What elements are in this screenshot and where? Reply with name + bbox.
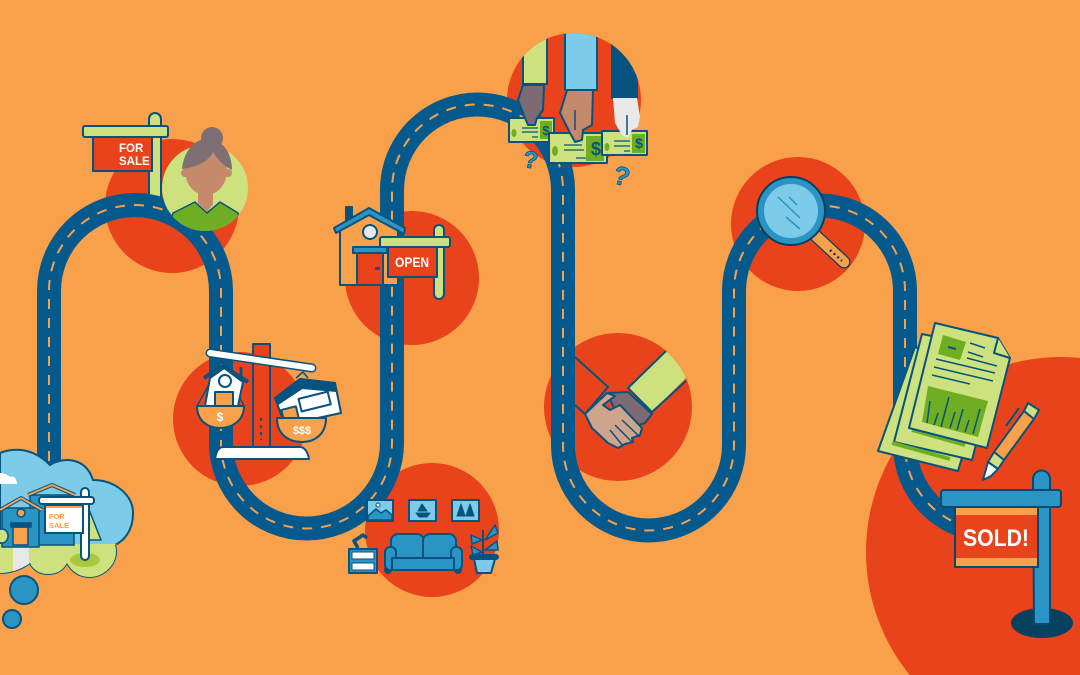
pencil (983, 403, 1039, 480)
beam (210, 353, 312, 368)
back house (30, 495, 74, 545)
sold text: SOLD! (963, 525, 1029, 552)
picture: mountains (367, 500, 393, 521)
sign post (1033, 470, 1050, 624)
red cuff (575, 357, 608, 414)
window (363, 225, 377, 239)
green cuff (628, 351, 686, 412)
magnifying glass (757, 177, 844, 262)
thought cloud: SALE (49, 521, 69, 530)
right sleeve (611, 44, 638, 99)
for sale sign (83, 113, 168, 203)
middle check (549, 133, 607, 163)
scale: $$$ (293, 425, 311, 437)
scale: $ (217, 410, 224, 424)
plant (470, 525, 498, 573)
three hands with checks (508, 33, 648, 186)
sofa (385, 534, 462, 573)
sold sign (941, 470, 1073, 638)
left check (509, 118, 554, 142)
small for sale text: FOR (49, 512, 65, 521)
sign board (955, 507, 1038, 567)
front house (2, 508, 39, 547)
left sleeve (522, 38, 548, 85)
thought bubble large (10, 576, 38, 604)
grass spot (70, 553, 100, 567)
house walls (340, 212, 398, 285)
ground (0, 544, 117, 577)
woman avatar (162, 127, 248, 240)
middle hand (560, 90, 593, 142)
for sale text: FOR (119, 143, 144, 155)
dark hand (607, 392, 652, 426)
picture: boat (409, 500, 436, 521)
road (49, 105, 990, 530)
for sale sign: SALE (119, 156, 150, 168)
tree (90, 510, 102, 541)
middle page (894, 334, 1000, 460)
neck (198, 193, 213, 212)
right check (602, 131, 647, 155)
thought cloud (0, 450, 135, 628)
three hands with checks: ? (610, 159, 633, 193)
documents (878, 323, 1010, 471)
open text: OPEN (395, 254, 429, 270)
right check: $ (635, 135, 643, 151)
right hand (613, 98, 640, 138)
front page (909, 323, 1010, 448)
door (357, 252, 383, 285)
hair (201, 127, 223, 149)
open sign (434, 225, 444, 299)
picture: trees (452, 500, 479, 521)
light hand (585, 393, 642, 448)
lens (757, 177, 825, 245)
white sign post (81, 488, 89, 560)
middle sleeve (564, 33, 598, 91)
left pan (197, 406, 244, 428)
right pan (277, 418, 326, 442)
thought bubble small (3, 610, 21, 628)
left hand (518, 85, 544, 125)
scale stand (253, 344, 270, 447)
sign base (1011, 608, 1073, 638)
nightstand and lamp (349, 535, 377, 573)
shirt (172, 201, 239, 231)
small sign board (45, 506, 83, 533)
middle check: $ (591, 139, 601, 159)
furniture (349, 500, 498, 573)
question marks: ? (522, 146, 540, 175)
back page (878, 347, 985, 471)
cloud puff (0, 473, 17, 484)
face (185, 147, 227, 195)
left house (197, 361, 244, 406)
cloud sky (0, 450, 133, 577)
scale (197, 344, 341, 459)
handle (816, 236, 844, 262)
right house (275, 379, 341, 425)
handshake (575, 351, 686, 448)
roof (334, 208, 405, 234)
left check: $ (542, 123, 550, 138)
crossbar (941, 490, 1061, 507)
chart (922, 386, 988, 437)
open house (334, 207, 450, 299)
